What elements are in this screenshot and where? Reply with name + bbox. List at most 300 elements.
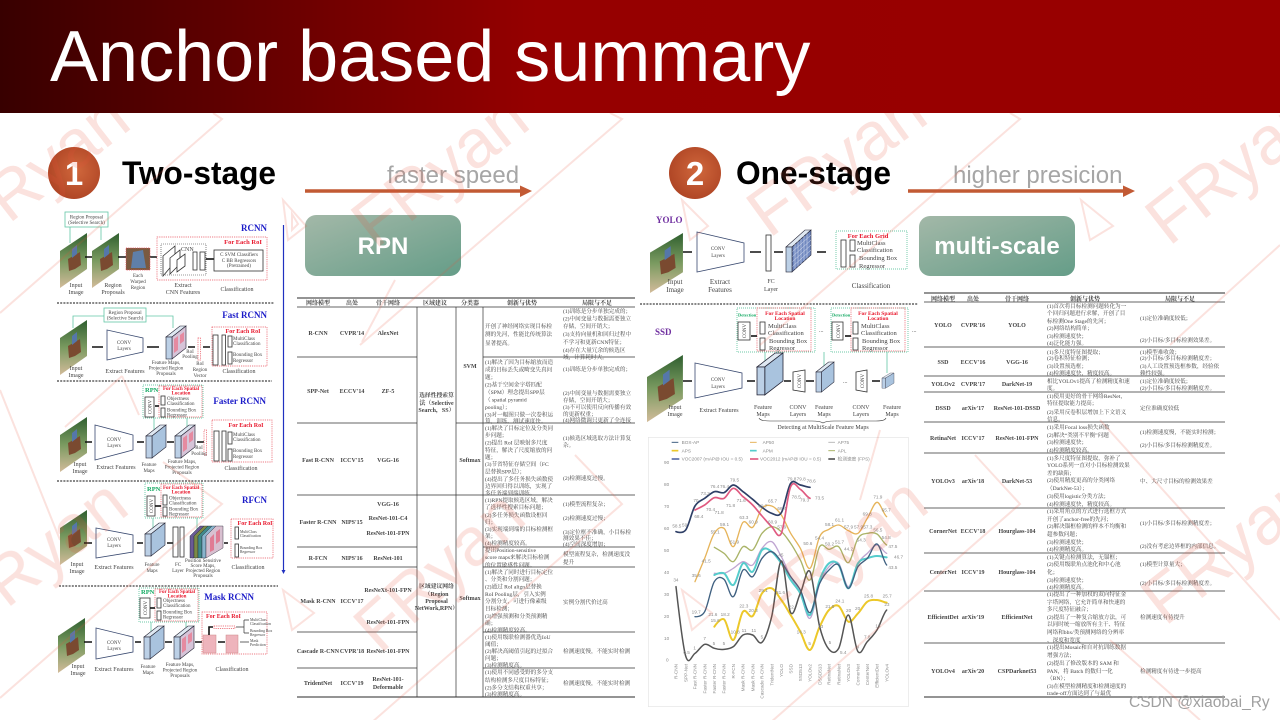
- diagram: Faster RCNN: MultiClass: [233, 433, 255, 438]
- row: EfficientDet: EfficientNet: [1002, 615, 1032, 621]
- diagram: RFCN: Extract Features: [94, 565, 134, 571]
- diagram: SSD: Maps: [817, 412, 831, 418]
- diagram: Faster RCNN: RPN: [145, 387, 159, 394]
- data labels: 57.9: [777, 524, 787, 529]
- data labels: 20.3: [749, 608, 758, 613]
- detection head 2: CONV: [837, 324, 842, 338]
- data labels: 11: [751, 628, 757, 633]
- data labels: 19.7: [692, 609, 701, 614]
- row: Mask R-CNN: 、分类和分割问题；: [485, 575, 535, 583]
- row: Faster R-CNN: 归；: [485, 518, 496, 526]
- chart legend: AP50: [763, 440, 774, 445]
- row: R-CNN: 存储，空间开销大；: [563, 322, 613, 330]
- row: Cascade R-CNN: (1)使用级联检测器优选IoU: [485, 633, 551, 641]
- row: Fast R-CNN: Softmax: [459, 458, 481, 464]
- row: Faster R-CNN: (3)实现端到端的目标检测框: [485, 525, 553, 533]
- row: R-FCN: ResNet-101: [373, 556, 403, 562]
- data labels: 54.8: [882, 535, 891, 540]
- diagram: RFCN: RPN: [147, 486, 161, 493]
- row: R-CNN: 不学习和更新CNN特征；: [563, 338, 625, 346]
- row: Fast R-CNN: 边界回归得以训练，实现了: [485, 482, 553, 490]
- data labels: 7.8: [864, 635, 871, 640]
- row: YOLOv2: 相比YOLOv1提高了检测精度和速: [1047, 377, 1130, 385]
- row: TridentNet: Deformable: [373, 685, 403, 691]
- diagram: YOLO: YOLO: [656, 215, 683, 225]
- diagram: Fast RCNN: CONV: [117, 341, 131, 346]
- line chart: detector performance: [648, 437, 908, 707]
- row: TridentNet: 检测速度慢，不能实时检测: [563, 679, 631, 687]
- x axis labels: RetinaNet: [836, 663, 841, 685]
- row: SPP-Net: 存储，空间开销大；: [563, 396, 613, 404]
- row: R-FCN: score maps来解决目标检测: [485, 553, 550, 561]
- data labels: 13: [875, 623, 881, 628]
- row: EfficientDet: 检测速度有待提升: [1140, 613, 1185, 621]
- series: APL: [714, 527, 887, 580]
- data labels: 5: [713, 641, 716, 646]
- diagram: RFCN: Classification: [240, 534, 261, 538]
- row: CenterNet: (4)检测精度高。: [1047, 583, 1087, 591]
- row: Fast R-CNN: VGG-16: [377, 458, 399, 464]
- row: TridentNet: ICCV'19: [340, 681, 364, 687]
- row: SPP-Net: 算，训练、测试速度快。: [485, 417, 547, 425]
- table header: [931, 294, 1195, 303]
- row: R-CNN: CVPR'14: [340, 331, 364, 337]
- y axis labels: 70: [664, 504, 670, 509]
- row: YOLOv3: 差的缺陷；: [1047, 469, 1075, 477]
- diagram: Mask RCNN: Classification: [163, 604, 191, 609]
- row: EfficientDet: [928, 590, 1185, 644]
- diagram: Mask RCNN: Bounding Box: [250, 629, 272, 633]
- row: CornerNet: Hourglass-104: [998, 529, 1036, 535]
- table: two-stage comparison: [297, 298, 635, 698]
- diagram: YOLO: Image: [666, 286, 684, 294]
- section heading: Two-stage: Two-stage: [122, 155, 276, 191]
- row: RetinaNet: RetinaNet: [930, 436, 956, 442]
- row: SPP-Net: 题；: [485, 373, 496, 381]
- diagram: Fast RCNN: Extract Features: [105, 369, 145, 375]
- diagram: YOLO: For Each Grid: [848, 233, 889, 240]
- x axis labels: R-CNN: [674, 664, 679, 679]
- row: YOLOv4: (1)提出Mosaic和自对抗训练数据: [1047, 643, 1126, 651]
- diagram: YOLO: Layers: [711, 254, 725, 259]
- diagram: Mask RCNN: Image: [70, 671, 86, 677]
- row: EfficientDet: 、深度和宽度: [1047, 636, 1081, 644]
- diagram: RFCN: Input: [71, 562, 84, 568]
- data labels: 1: [693, 645, 696, 650]
- x axis labels: [674, 663, 889, 699]
- diagram: Mask RCNN: Mask RCNN: [204, 592, 254, 602]
- data labels: 21.6: [708, 612, 718, 617]
- data labels: 7: [703, 636, 706, 641]
- series: VOC2007: [676, 482, 810, 532]
- data labels: 22: [789, 604, 794, 609]
- row: Fast R-CNN: ICCV'15: [340, 458, 364, 464]
- row: SSD: (3)人工设置预选框参数，经验依: [1140, 362, 1220, 370]
- row: RetinaNet: (4)检测精度较高。: [1047, 446, 1093, 454]
- x axis labels: TridentNet: [769, 663, 774, 686]
- data labels: 70.4: [706, 507, 715, 512]
- data labels: 41.5: [702, 558, 711, 563]
- row: Faster R-CNN: [299, 496, 631, 548]
- row: CenterNet: CenterNet: [930, 570, 956, 576]
- diagram: Mask RCNN: MultiClass: [250, 618, 267, 622]
- detection head 1: MultiClass: [768, 323, 797, 330]
- diagram: Mask RCNN: RPN: [141, 589, 155, 596]
- diagram: YOLO: FC: [767, 279, 775, 285]
- row: CenterNet: ICCV'19: [961, 570, 985, 576]
- detection head 2: For Each Spatial: [858, 311, 898, 317]
- icon: grid feature map: [786, 230, 811, 272]
- data labels: 5: [761, 634, 764, 639]
- row: SPP-Net: （SPM）理念提出SPP层: [485, 388, 545, 396]
- data labels: 78.6: [807, 479, 816, 484]
- data labels: 24.1: [835, 599, 845, 604]
- row: SPP-Net: (3)不可以使用反向传播有效: [563, 403, 631, 411]
- row: Mask R-CNN: 区域建议网络: [419, 581, 454, 590]
- diagram: SSD: ...: [912, 328, 917, 334]
- diagram: SSD: SSD: [655, 327, 672, 337]
- row: R-FCN: 的位置敏感性问题。: [485, 561, 535, 569]
- diagram: Faster RCNN: CONV: [148, 400, 154, 414]
- row: CornerNet: ECCV'18: [961, 529, 985, 535]
- row: EfficientDet: arXiv'19: [962, 615, 984, 621]
- row: YOLO: (4)泛化能力强。: [1047, 339, 1087, 347]
- diagram: Faster RCNN: Image: [72, 469, 88, 475]
- row: EfficientDet: (1)提出了一种加权的双向特征金: [1047, 590, 1127, 598]
- data labels: 65.7: [768, 499, 777, 504]
- x axis labels: Faster R-CNN: [702, 664, 707, 693]
- table header: 出处: [967, 294, 980, 303]
- row: SPP-Net: （ spatial pyramid: [485, 396, 527, 404]
- diagram: RFCN: Score Maps,: [190, 564, 216, 569]
- row: Fast R-CNN: 题；: [485, 453, 496, 461]
- section heading: Two-stage: [48, 147, 276, 199]
- diagram: Mask RCNN: Regressor: [163, 616, 183, 620]
- row: EfficientDet: 多尺度特征融合；: [1047, 605, 1092, 613]
- row: region proposal cell SS: 法（Selective: [419, 399, 454, 407]
- row: CornerNet: 开创了anchor-free的先河；: [1047, 515, 1112, 523]
- diagram: Mask RCNN: [58, 588, 272, 679]
- row: Mask R-CNN: NetWork,RPN）: [415, 605, 458, 612]
- header bar: [0, 0, 1280, 113]
- y axis labels: 40: [664, 570, 670, 575]
- row: YOLOv4: trade-off方面达到了与最优: [1047, 689, 1112, 697]
- data labels: 29.1: [759, 588, 768, 593]
- data labels: 34: [673, 577, 679, 582]
- data labels: 79.8: [787, 477, 797, 482]
- diagram: RFCN: Feature: [144, 563, 160, 568]
- diagram: RCNN: (Selective Search): [68, 221, 105, 226]
- row: YOLOv3: DarkNet-53: [1002, 479, 1032, 485]
- data labels: 58.5: [672, 523, 682, 528]
- diagram: RFCN: Projected Region: [186, 569, 221, 574]
- row: RetinaNet: ResNet-101-FPN: [996, 436, 1039, 442]
- row: Mask R-CNN: Softmax: [459, 596, 481, 602]
- row: YOLOv4: PAN，将 Batch 的数归一化: [1047, 667, 1113, 675]
- row: R-CNN: (4)存在大量冗余的候选区: [563, 346, 626, 354]
- data labels: 31.6: [776, 590, 785, 595]
- row: Mask R-CNN: 目标检测；: [485, 604, 513, 612]
- diagram: Mask RCNN: Proposals: [170, 674, 190, 679]
- data labels: 46.7: [894, 554, 903, 559]
- row: Faster R-CNN: Faster R-CNN: [299, 520, 337, 526]
- diagram: Mask RCNN: Regressor: [250, 633, 266, 637]
- diagram: RCNN: Region: [131, 286, 146, 291]
- data labels: 57.9: [854, 525, 863, 530]
- row: Faster R-CNN: 架；: [485, 532, 496, 540]
- row: R-CNN: AlexNet: [378, 331, 398, 337]
- section heading: One-stage: One-stage: [736, 155, 891, 191]
- row: CenterNet: (1)关键点检测算法，无锚框；: [1047, 553, 1121, 561]
- row: R-FCN: 提升: [563, 558, 575, 566]
- diagram: RFCN: Classification: [232, 564, 264, 571]
- row: SSD: [937, 348, 1220, 377]
- row: Fast R-CNN: (2)检测速度过慢。: [563, 474, 609, 482]
- diagram: SSD: CONV: [711, 378, 725, 383]
- row: YOLOv4: [931, 643, 1202, 697]
- diagram: Mask RCNN: Projected Region: [163, 668, 198, 674]
- diagram: RFCN: For Each RoI: [238, 521, 273, 527]
- diagram: Fast RCNN: MultiClass: [233, 337, 255, 342]
- data labels: 22.3: [739, 603, 749, 608]
- row: CornerNet: (2)没有考虑边界框的内部信息。: [1140, 542, 1219, 550]
- diagram: Mask RCNN: CONV: [144, 601, 149, 615]
- row: Fast R-CNN: (1)解决了目标定位及分类同: [485, 424, 553, 432]
- row: YOLOv3: (4)检测速度快，精度较高。: [1047, 500, 1115, 508]
- data labels: 13: [818, 624, 824, 629]
- table header: 局限与不足: [1165, 294, 1195, 303]
- data labels: 63.3: [739, 515, 749, 520]
- diagram: Fast RCNN: Feature Maps,: [152, 361, 180, 366]
- diagram: Mask RCNN: Classification: [250, 622, 271, 626]
- table header: 骨干网络: [376, 298, 400, 307]
- detection head 1: Classification: [768, 330, 804, 337]
- row: region proposal cell SS: [418, 390, 455, 415]
- row: Cascade R-CNN: 检测速度慢，不能实时检测: [563, 647, 631, 655]
- data labels: 60.9: [749, 520, 758, 525]
- diagram: RFCN: For Each Spatial: [163, 486, 200, 491]
- table header: 分类器: [461, 298, 479, 307]
- row: R-FCN: 提出Position-sensitive: [485, 546, 536, 554]
- row: YOLOv3: arXiv'18: [962, 479, 984, 485]
- data labels: 73.2: [701, 491, 710, 496]
- data labels: 43.5: [888, 565, 898, 570]
- background watermark pattern: FRyan: [337, 79, 542, 262]
- x axis labels: Faster R-CNN: [722, 664, 727, 693]
- diagram: RCNN: CNN: [181, 247, 194, 253]
- table header: 创新与优势: [507, 298, 537, 307]
- row: CornerNet: CornerNet: [929, 529, 957, 535]
- data labels: 71.8: [715, 510, 724, 515]
- diagram: SSD: Feature: [754, 405, 772, 411]
- x axis labels: SPP-Net: [683, 663, 688, 682]
- chart legend: 检测速度 (FPS): [838, 456, 870, 463]
- arrow: faster speed: [305, 162, 532, 197]
- row: RetinaNet: (2)小目标/多目标检测精度差。: [1140, 441, 1215, 449]
- row: SSD: (2)卷积特征检测；: [1047, 354, 1093, 362]
- row: Fast R-CNN: Fast R-CNN: [302, 458, 335, 464]
- data labels: 56.5: [873, 527, 883, 532]
- data labels: 5: [723, 641, 726, 646]
- row: YOLO: (1)定位准确度较低；: [1140, 314, 1191, 322]
- row: RetinaNet: (1)采用Focal loss损失函数: [1047, 423, 1110, 431]
- row: Cascade R-CNN: (2)解决高阈值引起的过拟合: [485, 647, 553, 655]
- y axis labels: [664, 460, 670, 663]
- row: YOLO: CVPR'16: [961, 323, 985, 329]
- y axis labels: 20: [664, 614, 670, 619]
- row: DSSD: [935, 392, 1180, 423]
- diagram: RFCN: Proposals: [193, 574, 213, 579]
- row: CenterNet: Hourglass-104: [998, 570, 1036, 576]
- row: CenterNet: (3)检测速度快；: [1047, 576, 1087, 584]
- diagram: Fast RCNN: Projected Region: [149, 366, 184, 372]
- diagram: RCNN: Proposals: [101, 290, 125, 296]
- diagram: RFCN: MultiClass: [240, 530, 257, 534]
- row: YOLOv2: 度。: [1047, 384, 1058, 392]
- diagram: SSD: Layers: [853, 412, 870, 418]
- callout: multi-scale: [919, 216, 1075, 276]
- diagram: Faster RCNN: Maps: [143, 469, 155, 474]
- row: Mask R-CNN: (2)通过 RoI align层替换: [485, 582, 542, 590]
- row: EfficientDet: EfficientDet: [928, 615, 958, 621]
- row: Fast R-CNN: (4)提出了多任务损失函数使: [485, 475, 553, 483]
- row: YOLOv3: YOLOv3: [931, 479, 955, 485]
- data labels: 73.5: [815, 496, 824, 501]
- series: AP50: [695, 502, 887, 582]
- diagram: SSD: Layers: [711, 385, 725, 390]
- section heading: Two-stage: 1: [65, 155, 83, 192]
- detection head 1: For Each Spatial: [765, 311, 805, 317]
- row: DSSD: 定位准确度较低: [1140, 404, 1180, 412]
- diagram: SSD: CONV: [798, 374, 803, 388]
- detection head 1: Bounding Box: [769, 338, 808, 345]
- detection head 1: Regressor: [769, 345, 796, 352]
- row: YOLOv4: arXiv'20: [962, 669, 984, 675]
- diagram: YOLO: CONV: [711, 247, 725, 252]
- table header: 骨干网络: [1005, 294, 1029, 303]
- row: TridentNet: (2)多分支结构权重共享；: [485, 684, 547, 692]
- diagram: Mask RCNN: Extract Features: [94, 667, 134, 673]
- diagram: YOLO: Classification: [852, 282, 891, 290]
- row: Cascade R-CNN: ResNet-101-FPN: [367, 649, 410, 655]
- chart legend: [672, 440, 870, 463]
- row: SSD: (4)检测速度快，精度较高。: [1047, 369, 1115, 377]
- diagram: Fast RCNN: Region Proposal: [108, 311, 142, 316]
- diagram: Fast RCNN: (Selective Search): [107, 316, 144, 322]
- diagram: Fast RCNN: Regressor: [233, 359, 253, 364]
- row: CenterNet: (2)使用级联角点池化和中心池: [1047, 560, 1121, 568]
- diagram: SSD: Feature: [883, 405, 901, 411]
- row: YOLOv2: YOLOv2: [931, 382, 955, 388]
- diagram: SSD: ...: [819, 328, 824, 334]
- row: DSSD: 信息。: [1047, 415, 1064, 423]
- row: YOLOv3: YOLO系列一直对小目标检测效果: [1047, 461, 1130, 469]
- row: SSD: SSD: [937, 360, 949, 366]
- detection head 2: Detection: [832, 312, 851, 318]
- row: SSD: (3)设置预选框；: [1047, 362, 1087, 370]
- row: SPP-Net: 成的目标丢失或畸变失真问: [485, 366, 553, 374]
- row: Mask R-CNN: RoI Pooling层，引入实例: [485, 590, 546, 598]
- chart legend: APM: [763, 448, 773, 453]
- row: SPP-Net: (1)训练是分步单独完成的；: [563, 365, 631, 373]
- data labels: 79.3: [800, 497, 809, 502]
- data labels: 66.4: [777, 506, 787, 511]
- data labels: 70: [693, 498, 699, 503]
- table header: 局限与不足: [582, 298, 612, 307]
- title: Anchor based summary: [50, 17, 810, 97]
- diagram: RFCN: FC: [175, 563, 182, 568]
- diagram: RCNN: Classification: [220, 286, 254, 293]
- diagram: SSD: Image: [668, 412, 683, 418]
- x axis labels: RetinaNet: [827, 663, 832, 685]
- row: Fast R-CNN: (3)节省特征存储空间（FC: [485, 460, 549, 468]
- row: Mask R-CNN: （Region: [424, 591, 449, 598]
- detection head 1: CONV: [743, 324, 748, 338]
- diagram: Mask RCNN: Bounding Box: [163, 610, 193, 616]
- diagram: Fast RCNN: Pooling: [182, 355, 198, 360]
- row: YOLOv3: (1)多尺度特征图提取，弥补了: [1047, 454, 1121, 462]
- row: RetinaNet: (3)检测速度快；: [1047, 438, 1087, 446]
- row: Faster R-CNN: 了选择性搜索目标问题；: [485, 503, 547, 511]
- row: Faster R-CNN: (4)检测精度较高。: [485, 539, 531, 547]
- row: YOLOv2: (1)定位准确度较低；: [1140, 377, 1191, 385]
- diagram: RCNN: RCNN: [241, 223, 267, 233]
- row: SSD: (1)多尺度特征图提取；: [1047, 348, 1104, 356]
- panel: one-stage architectures: [640, 215, 918, 431]
- detection head 1: [737, 308, 815, 352]
- diagram: SSD: Detecting at MultiScale Feature Maps: [777, 425, 869, 431]
- detection head 2: Location: [868, 316, 888, 322]
- diagram: Faster RCNN: Projected Region: [165, 466, 200, 470]
- data labels: 5: [808, 641, 811, 646]
- x axis labels: R-FCN: [731, 664, 736, 678]
- x axis labels: Mask R-CNN: [741, 664, 746, 691]
- diagram: YOLO: Extract: [710, 278, 730, 286]
- row: Faster R-CNN: NIPS'15: [341, 520, 363, 526]
- row: Mask R-CNN: ResNeXt-101-FPN: [364, 588, 412, 594]
- diagram: SSD: Extract Features: [699, 408, 739, 414]
- row: Cascade R-CNN: [297, 633, 631, 669]
- callout: RPN: [305, 215, 461, 276]
- diagram: YOLO: Classification: [857, 247, 893, 254]
- detection head 2: Bounding Box: [862, 338, 901, 345]
- row: YOLOv3: 中、大尺寸目标的检测效果差: [1140, 477, 1213, 485]
- diagram: YOLO: Layer: [764, 287, 778, 293]
- row: Mask R-CNN: 实例分割代价过高: [563, 598, 608, 606]
- row: SSD: VGG-16: [1006, 360, 1028, 366]
- row: Faster R-CNN: (1)模型流程复杂；: [563, 500, 609, 508]
- diagram: Faster RCNN: Classification: [167, 402, 195, 407]
- diagram: RCNN: For Each RoI: [224, 239, 262, 246]
- chart legend: VOC2012 (mAP@ IOU = 0.5): [760, 457, 821, 462]
- diagram: Fast RCNN: RoI: [196, 362, 204, 367]
- row: SPP-Net: (2)基于空间金字塔匹配: [485, 380, 542, 388]
- diagram: RCNN: C BB Regressors: [222, 259, 256, 264]
- row: Cascade R-CNN: Cascade R-CNN: [297, 649, 340, 655]
- table header: 出处: [346, 298, 359, 307]
- data labels: 20: [846, 608, 852, 613]
- data labels: 14.3: [797, 629, 806, 634]
- row: SSD: 赖性较强。: [1140, 369, 1168, 377]
- row: CenterNet: (1)模型计算量大；: [1140, 560, 1186, 568]
- row: SPP-Net: ECCV'14: [340, 389, 364, 395]
- table header: 网络模型: [931, 294, 955, 303]
- x axis labels: SSD513: [798, 664, 803, 681]
- data labels: 78.5: [792, 494, 801, 499]
- data labels: 58.1: [825, 522, 834, 527]
- row: DSSD: (1)使用更好的骨干网络ResNet，: [1047, 392, 1126, 400]
- row: SPP-Net: [307, 358, 631, 425]
